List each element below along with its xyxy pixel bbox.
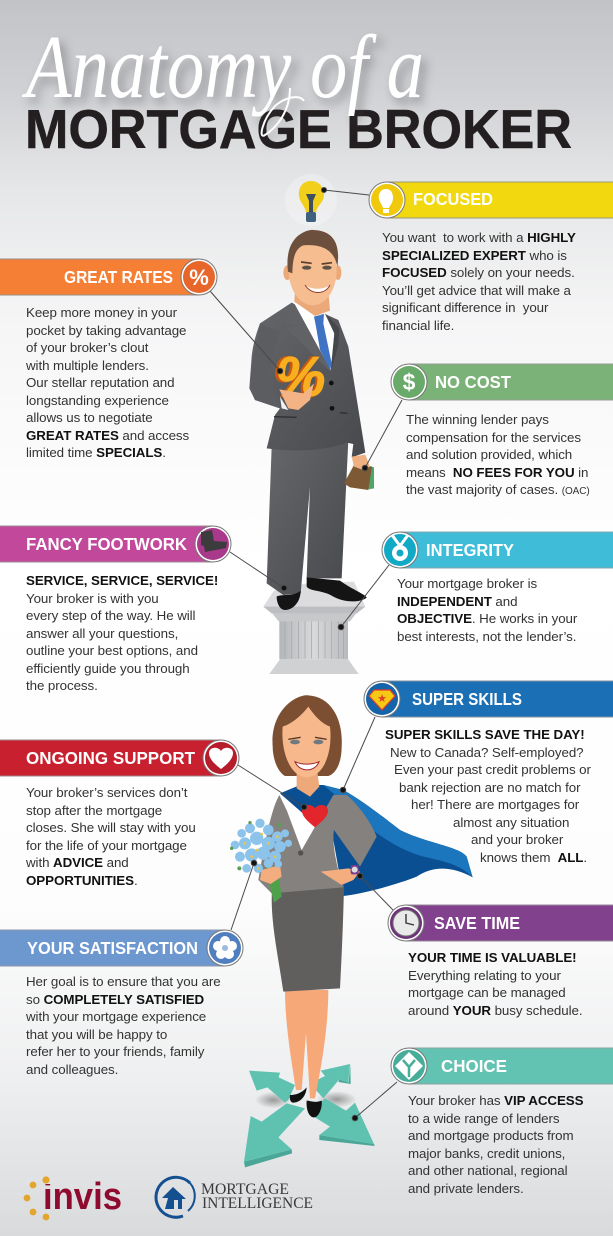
text: ongoing support	[26, 785, 196, 888]
text: focused: significant difference in your	[382, 300, 548, 315]
text: choice	[408, 1093, 583, 1196]
legs	[285, 990, 328, 1098]
skirt	[272, 885, 344, 992]
icon: superhero shield	[369, 690, 395, 710]
text: ongoing support: closes. She will stay with you	[26, 820, 196, 835]
connector: focused	[322, 188, 369, 195]
text: no cost: The winning lender pays	[406, 412, 549, 427]
icon: flower	[213, 936, 237, 959]
text: integrity	[397, 576, 578, 644]
text: no cost: and solution provided, which	[406, 447, 572, 462]
text: focused: You want to work with a HIGHLY	[382, 230, 576, 245]
banner: your satisfaction	[0, 930, 243, 966]
text: integrity: OBJECTIVE. He works in your	[397, 611, 577, 626]
logo: mortgage intelligence: MORTGAGE	[201, 1181, 289, 1198]
text: choice: and mortgage products from	[408, 1128, 574, 1143]
hand on hip	[321, 868, 360, 885]
text: your satisfaction: Her goal is to ensure that you are	[26, 974, 221, 989]
text: great rates: GREAT RATES and access	[26, 428, 189, 442]
tie	[314, 314, 332, 370]
connector: fancy footwork	[230, 552, 287, 591]
icon: dollar: $	[403, 369, 416, 395]
icon: superhero shield: ★	[377, 693, 387, 705]
banner: save time	[388, 905, 613, 941]
text: fancy footwork: the process.	[26, 678, 98, 693]
text: super skills: SUPER SKILLS SAVE THE DAY!	[385, 727, 585, 742]
text: great rates: limited time SPECIALS.	[26, 445, 166, 460]
text: choice: and other national, regional	[408, 1163, 568, 1178]
text: great rates: Our stellar reputation and	[26, 375, 174, 390]
title bold line: MORTGAGE BROKER	[25, 98, 572, 160]
connector: great rates	[210, 291, 283, 374]
text: your satisfaction: with your mortgage experience	[26, 1009, 206, 1024]
logo: mortgage intelligence	[156, 1177, 313, 1217]
wallet in hand	[344, 455, 374, 490]
connector: ongoing support	[238, 765, 307, 810]
jacket right lapel	[326, 314, 339, 370]
head	[272, 695, 342, 797]
bouquet of blue flowers	[230, 819, 292, 903]
title	[22, 18, 572, 160]
percent sign in hand: %	[276, 345, 325, 408]
text: great rates: Keep more money in your	[26, 305, 177, 320]
text: no cost: compensation for the services	[406, 430, 581, 444]
connector: integrity	[338, 565, 389, 630]
logo: invis	[24, 1172, 122, 1220]
text: save time: Everything relating to your	[408, 968, 561, 982]
banner: choice	[391, 1048, 613, 1084]
text: no cost: means NO FEES FOR YOU in	[406, 464, 588, 480]
banner: no cost	[391, 364, 613, 400]
banner: no cost: NO COST	[435, 372, 511, 392]
text: your satisfaction: and colleagues.	[26, 1062, 118, 1076]
text: save time: YOUR TIME IS VALUABLE!	[408, 950, 576, 965]
text: choice: major banks, credit unions,	[408, 1146, 565, 1160]
direction arrows	[244, 1064, 375, 1167]
trousers	[267, 440, 348, 595]
text: no cost: the vast majority of cases. (OAC)	[406, 482, 590, 497]
banner: integrity	[382, 532, 613, 568]
jacket	[249, 303, 365, 457]
text: great rates: allows us to negotiate	[26, 410, 153, 425]
banner: super skills	[364, 681, 613, 717]
red heart on chest	[302, 805, 328, 827]
banner: ongoing support: ONGOING SUPPORT	[26, 748, 195, 768]
banner: great rates	[0, 259, 217, 295]
banner: fancy footwork: FANCY FOOTWORK	[26, 534, 187, 554]
text: great rates: longstanding experience	[26, 392, 169, 408]
text: ongoing support: Your broker’s services don’t	[26, 785, 187, 800]
text: great rates: pocket by taking advantage	[26, 322, 186, 338]
text: save time: around YOUR busy schedule.	[408, 1002, 582, 1018]
connector: super skills	[340, 717, 375, 793]
banner: super skills: SUPER SKILLS	[412, 689, 522, 709]
connector: choice	[352, 1082, 397, 1121]
text: focused: financial life.	[382, 318, 454, 332]
shoes	[290, 1087, 322, 1117]
text: fancy footwork: outline your best options, and	[26, 643, 198, 658]
icon: light bulb above head	[285, 174, 337, 226]
text: integrity: best interests, not the lender’s.	[397, 628, 576, 644]
text: no cost	[406, 412, 590, 497]
connector: your satisfaction	[231, 860, 257, 930]
percent sign in hand: %	[273, 345, 324, 409]
banner: great rates: GREAT RATES	[64, 267, 173, 287]
text: save time	[408, 950, 582, 1018]
shoes	[277, 577, 367, 610]
text: fancy footwork: efficiently guide you through	[26, 660, 190, 676]
cape	[280, 785, 473, 896]
text: choice: Your broker has VIP ACCESS	[408, 1093, 583, 1108]
shirt	[293, 302, 334, 370]
title script line: Anatomy of a	[22, 18, 424, 117]
text: choice: to a wide range of lenders	[408, 1110, 559, 1126]
text: ongoing support: with ADVICE and	[26, 855, 129, 870]
text: super skills: almost any situation	[453, 814, 569, 830]
lapel	[285, 303, 331, 372]
icon: medal	[392, 535, 408, 561]
text: super skills: knows them ALL.	[480, 850, 587, 864]
icon: heart	[209, 748, 233, 769]
text: fancy footwork: every step of the way. He will	[26, 608, 195, 623]
text: ongoing support: OPPORTUNITIES.	[26, 872, 138, 888]
text: fancy footwork: SERVICE, SERVICE, SERVICE!	[26, 573, 218, 588]
icon: fork in road	[395, 1052, 423, 1080]
banner: save time: SAVE TIME	[434, 913, 520, 933]
text: ongoing support: stop after the mortgage	[26, 802, 162, 818]
connector lines	[210, 188, 402, 1121]
figure: male broker on pedestal	[249, 230, 374, 674]
text: super skills: New to Canada? Self-employed?	[390, 744, 584, 760]
banner: ongoing support	[0, 740, 239, 776]
text: integrity: Your mortgage broker is	[397, 576, 537, 591]
text: super skills	[385, 727, 591, 864]
text: integrity: INDEPENDENT and	[397, 594, 517, 608]
text: ongoing support: for the life of your mortgage	[26, 838, 187, 852]
figure: female broker with cape	[230, 695, 473, 1167]
text: great rates	[26, 305, 189, 460]
text: focused	[382, 230, 576, 332]
banner: your satisfaction: YOUR SATISFACTION	[27, 938, 198, 958]
icon: percent: %	[189, 265, 209, 290]
watch	[351, 865, 359, 874]
pedestal	[263, 582, 365, 674]
text: focused: SPECIALIZED EXPERT who is	[382, 248, 567, 262]
banner: integrity: INTEGRITY	[426, 540, 514, 560]
text: super skills: bank rejection are no match for	[399, 780, 580, 794]
connector: no cost	[362, 400, 402, 471]
text: choice: and private lenders.	[408, 1180, 524, 1196]
text: great rates: with multiple lenders.	[26, 358, 149, 372]
icon: clock	[393, 910, 419, 936]
text: fancy footwork	[26, 573, 218, 693]
text: your satisfaction: that you will be happy to	[26, 1026, 167, 1042]
text: super skills: and your broker	[471, 832, 563, 847]
banner: focused: FOCUSED	[413, 189, 493, 209]
logo: mortgage intelligence: INTELLIGENCE	[202, 1195, 313, 1212]
banner: fancy footwork	[0, 526, 231, 562]
text: your satisfaction: refer her to your friends, family	[26, 1044, 204, 1059]
text: focused: FOCUSED solely on your needs.	[382, 265, 575, 280]
blazer	[258, 795, 377, 893]
banner: choice: CHOICE	[441, 1056, 507, 1076]
text: save time: mortgage can be managed	[408, 985, 566, 1000]
text: super skills: her! There are mortgages for	[411, 797, 579, 812]
text: fancy footwork: answer all your questions,	[26, 626, 178, 640]
logo: invis: invis	[43, 1176, 122, 1218]
head	[283, 230, 341, 316]
icon: bulb	[379, 189, 393, 213]
icon: shoe	[201, 530, 227, 552]
connector: save time	[357, 873, 393, 910]
text: your satisfaction	[26, 974, 221, 1076]
text: super skills: Even your past credit problems or	[394, 762, 591, 777]
text: fancy footwork: Your broker is with you	[26, 590, 159, 606]
text: focused: You’ll get advice that will make a	[382, 282, 571, 298]
text: your satisfaction: so COMPLETELY SATISFIED	[26, 992, 204, 1006]
text: great rates: of your broker’s clout	[26, 340, 148, 355]
banner: focused	[369, 182, 613, 218]
